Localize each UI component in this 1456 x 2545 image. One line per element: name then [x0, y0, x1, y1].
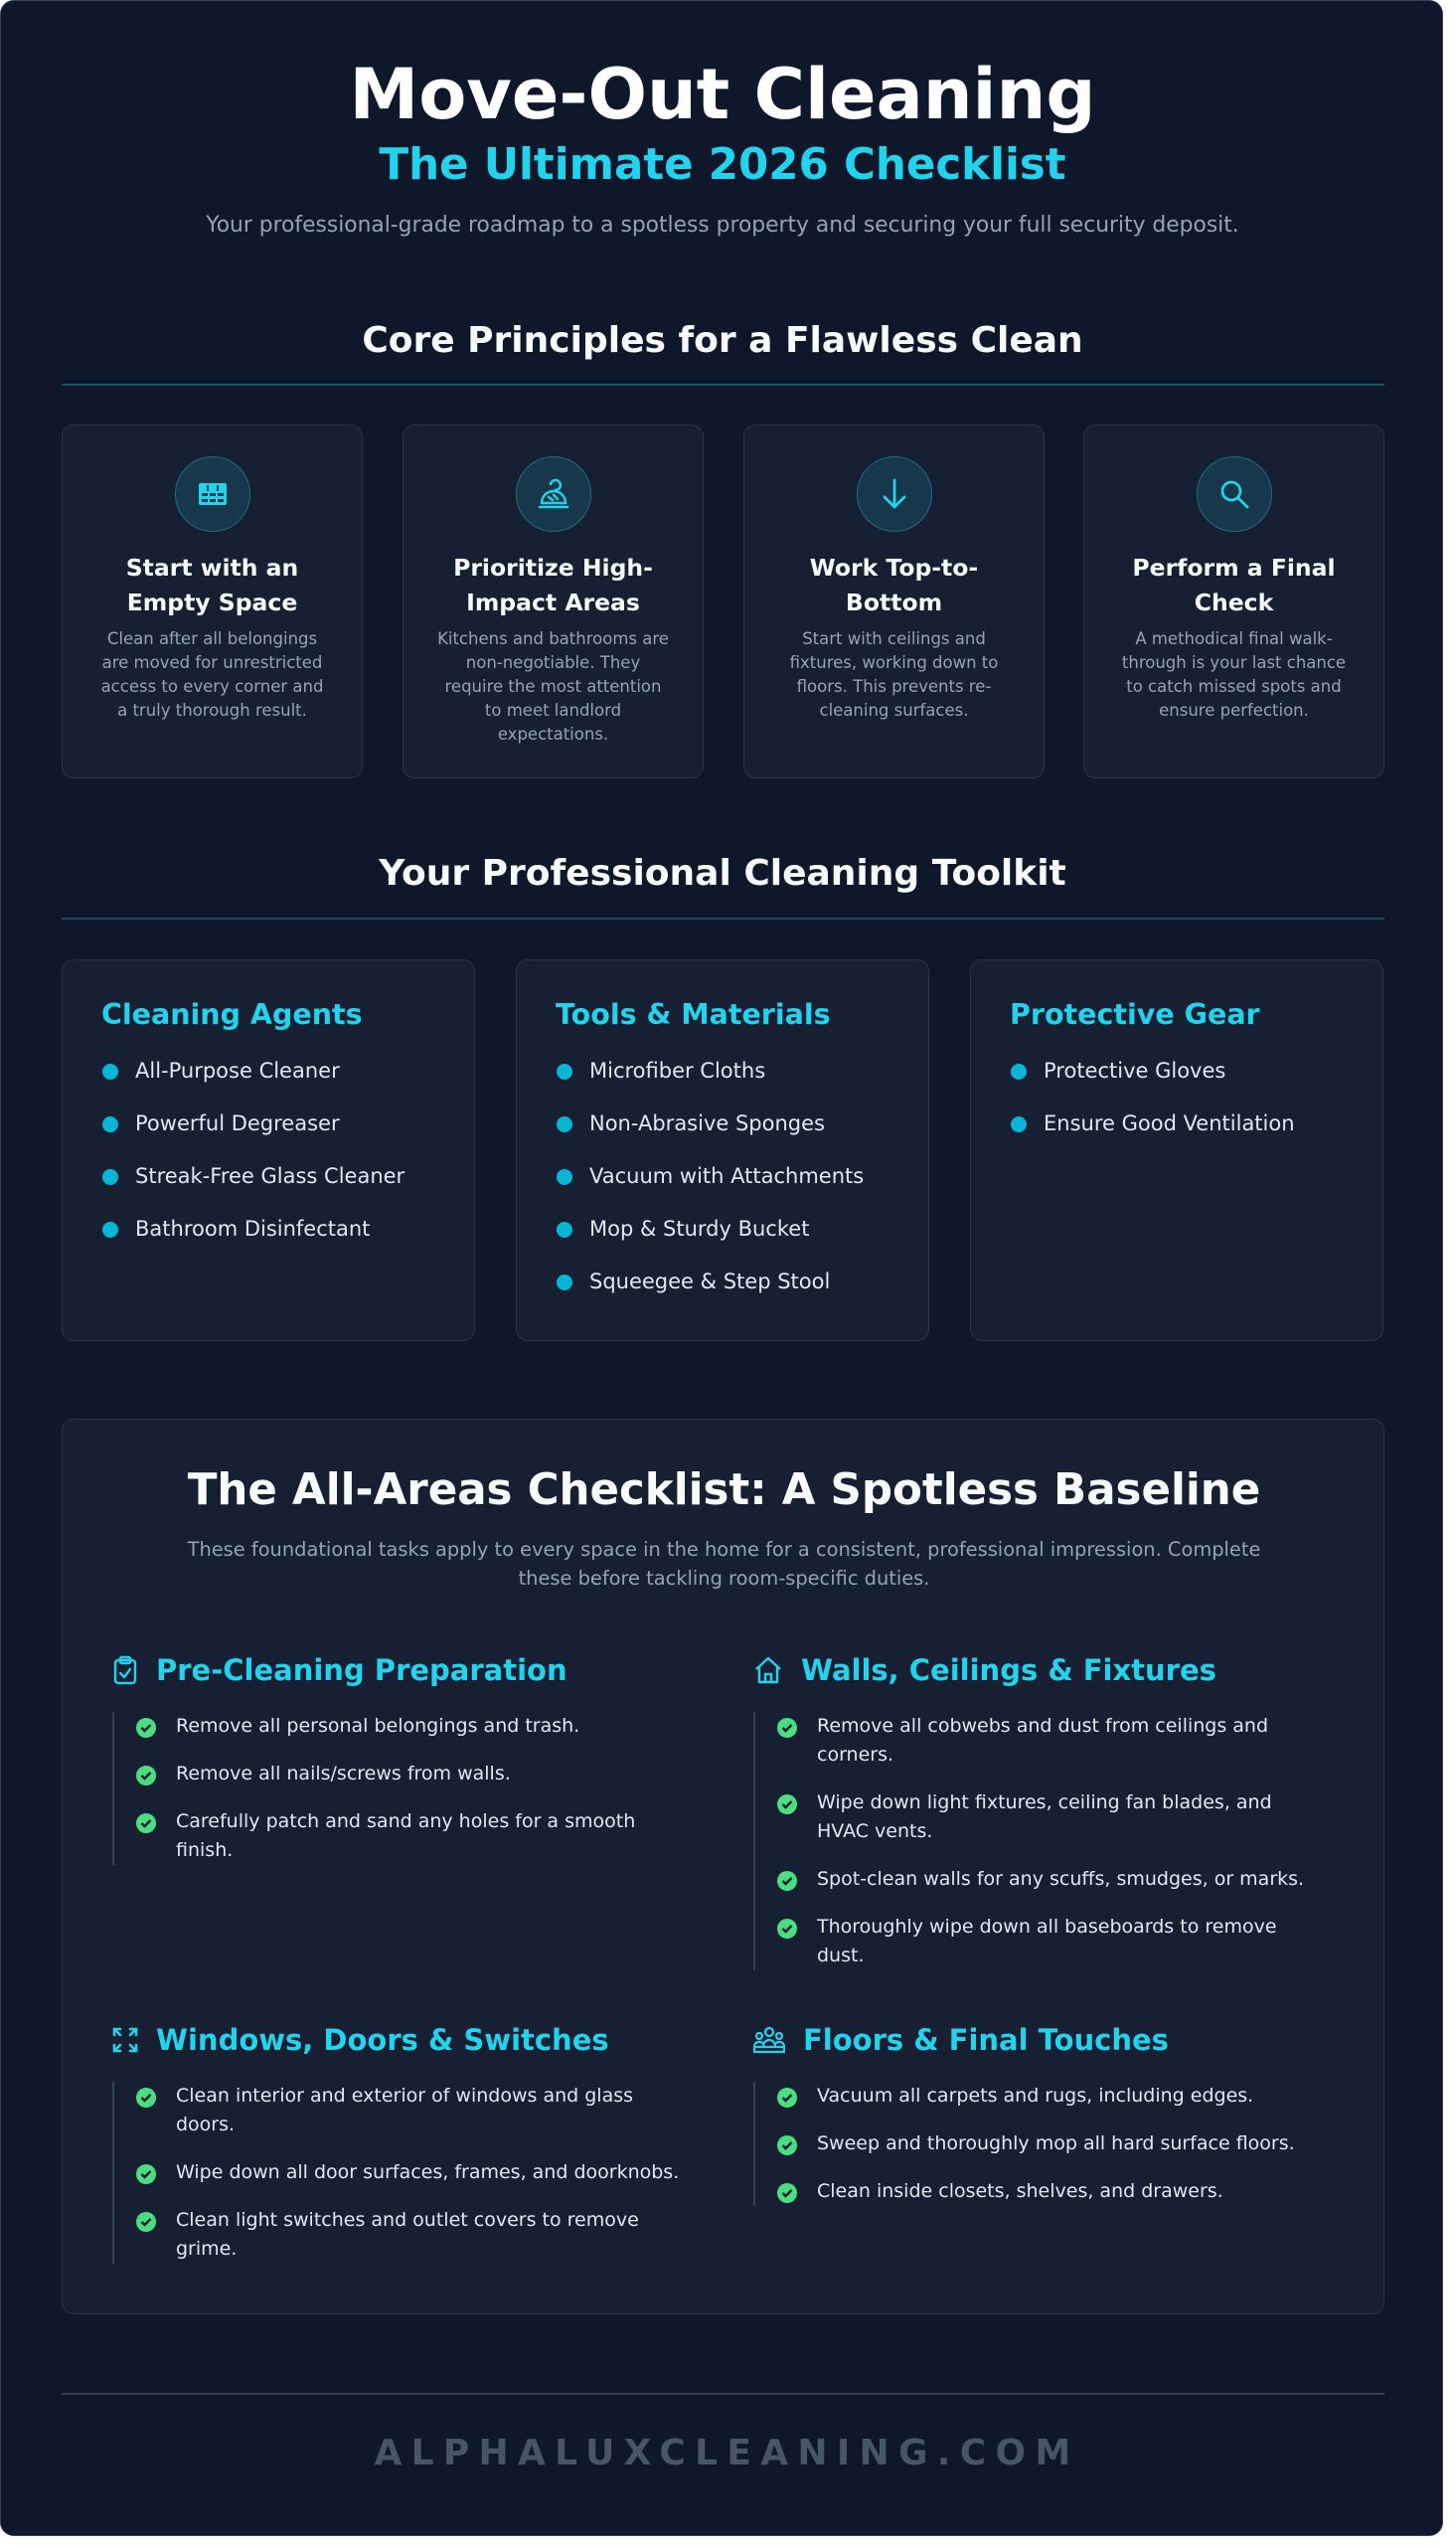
panel: all-areas checklist: Remove all personal belongings and trash.: [176, 1715, 579, 1737]
list: agents: All-Purpose Cleaner: [135, 1059, 340, 1083]
panel: principle 3: [743, 424, 1045, 778]
panel: tools: Tools & Materials: [556, 998, 831, 1031]
list: agents: Powerful Degreaser: [135, 1111, 340, 1135]
list: tools: Vacuum with Attachments: [589, 1164, 864, 1188]
panel: all-areas checklist: Thoroughly wipe down all baseboards to remove dust.: [817, 1916, 1277, 1966]
list: gear: Protective Gloves: [1044, 1059, 1225, 1083]
panel: principle 1: [62, 424, 363, 778]
icon: grid: [175, 456, 250, 532]
heading: toolkit: Your Professional Cleaning Toolkit: [379, 853, 1066, 894]
card title: Impact Areas: [466, 589, 640, 616]
panel: all-areas checklist: Windows, Doors & Switches: [156, 2023, 609, 2057]
panel: all-areas checklist: Remove all nails/screws from walls.: [176, 1763, 511, 1784]
panel: protective gear: Protective Gear: [1010, 998, 1260, 1031]
panel: all-areas checklist: Vacuum all carpets and rugs, including edges.: [817, 2085, 1253, 2107]
card text: Kitchens and bathrooms are non-negotiable. They require the most attention to meet landlord expectations.: [437, 629, 669, 744]
list: tools: Non-Abrasive Sponges: [589, 1111, 825, 1135]
panel: all-areas checklist: Carefully patch and sand any holes for a smooth finish.: [176, 1810, 635, 1861]
panel: principle 4: [1083, 424, 1384, 778]
card title: Start with an: [126, 554, 298, 582]
section: walls: [753, 1653, 1304, 1970]
panel: cleaning agents: Cleaning Agents: [101, 998, 363, 1031]
card text: Start with ceilings and fixtures, working down to floors. This prevents re-cleaning surfaces.: [790, 629, 998, 720]
section: windows: [112, 2023, 679, 2264]
subtitle: The Ultimate 2026 Checklist: [379, 140, 1066, 190]
icon: search: [1197, 456, 1272, 532]
list: tools: [557, 1059, 864, 1293]
panel: all-areas checklist: Clean interior and exterior of windows and glass doors.: [176, 2085, 633, 2135]
list: agents: Streak-Free Glass Cleaner: [135, 1164, 404, 1188]
panel: principle 2: [403, 424, 704, 778]
icon: bell: [516, 456, 591, 532]
card title: Check: [1195, 589, 1273, 616]
panel: all-areas checklist: Pre-Cleaning Preparation: [156, 1653, 567, 1687]
card text: Clean after all belongings are moved for unrestricted access to every corner and a truly thorough result.: [101, 629, 323, 720]
panel: all-areas checklist: Sweep and thoroughly mop all hard surface floors.: [817, 2132, 1295, 2154]
panel: protective gear: [970, 959, 1383, 1341]
list: gear: Ensure Good Ventilation: [1044, 1111, 1295, 1135]
panel: all-areas checklist: Wipe down all door surfaces, frames, and doorknobs.: [176, 2161, 679, 2183]
list: gear: [1011, 1059, 1295, 1135]
card title: Empty Space: [127, 589, 297, 616]
list: tools: Microfiber Cloths: [589, 1059, 765, 1083]
card title: Perform a Final: [1132, 554, 1336, 582]
panel: all-areas checklist: [62, 1419, 1384, 2314]
card title: Prioritize High-: [453, 554, 653, 582]
section: pre-cleaning: [112, 1653, 635, 1865]
panel: all-areas checklist: Remove all cobwebs and dust from ceilings and corners.: [817, 1715, 1268, 1766]
panel: all-areas checklist: Spot-clean walls for any scuffs, smudges, or marks.: [817, 1868, 1304, 1890]
list: agents: [102, 1059, 405, 1241]
panel: cleaning agents: [62, 959, 475, 1341]
panel: all-areas checklist: Clean inside closets, shelves, and drawers.: [817, 2180, 1223, 2202]
card title: [1132, 554, 1336, 616]
heading: core principles: Core Principles for a Flawless Clean: [362, 320, 1083, 361]
tagline: Your professional-grade roadmap to a spotless property and securing your full security deposit.: [206, 213, 1239, 238]
icon: arrow down: [857, 456, 932, 532]
description: These foundational tasks apply to every space in the home for a consistent, professional impression. Complete these before tackling room-specific duties.: [188, 1538, 1260, 1590]
panel: all-areas checklist: Floors & Final Touches: [803, 2023, 1169, 2057]
panel: tools: [516, 959, 929, 1341]
list: agents: Bathroom Disinfectant: [135, 1217, 370, 1241]
card title: Work Top-to-: [810, 554, 978, 582]
card title: [453, 554, 653, 616]
panel: all-areas checklist: Walls, Ceilings & Fixtures: [801, 1653, 1216, 1687]
card title: [810, 554, 978, 616]
section: floors: [753, 2023, 1295, 2206]
card title: [126, 554, 298, 616]
panel: all-areas checklist: Clean light switches and outlet covers to remove grime.: [176, 2209, 639, 2260]
list: tools: Mop & Sturdy Bucket: [589, 1217, 809, 1241]
card title: Bottom: [846, 589, 942, 616]
footer: website: ALPHALUXCLEANING.COM: [374, 2433, 1080, 2473]
title: Move-Out Cleaning: [350, 54, 1095, 135]
heading: The All-Areas Checklist: A Spotless Baseline: [188, 1465, 1260, 1515]
card text: A methodical final walk-through is your last chance to catch missed spots and ensure perfection.: [1122, 629, 1346, 720]
panel: all-areas checklist: Wipe down light fixtures, ceiling fan blades, and HVAC vents.: [817, 1791, 1272, 1842]
list: tools: Squeegee & Step Stool: [589, 1270, 830, 1293]
